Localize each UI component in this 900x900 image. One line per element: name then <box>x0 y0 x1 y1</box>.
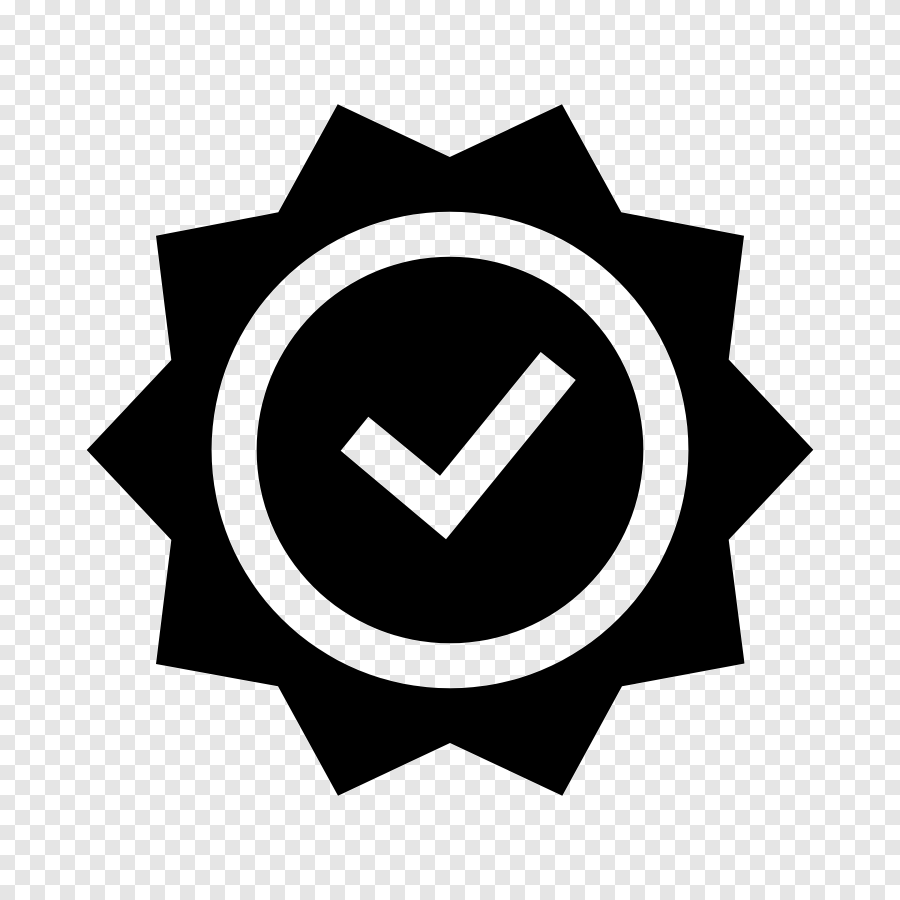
badge outer star with ring cut-out <box>87 104 813 796</box>
icon: badge <box>87 104 813 796</box>
inner disc with check mark cut-out <box>257 257 643 643</box>
